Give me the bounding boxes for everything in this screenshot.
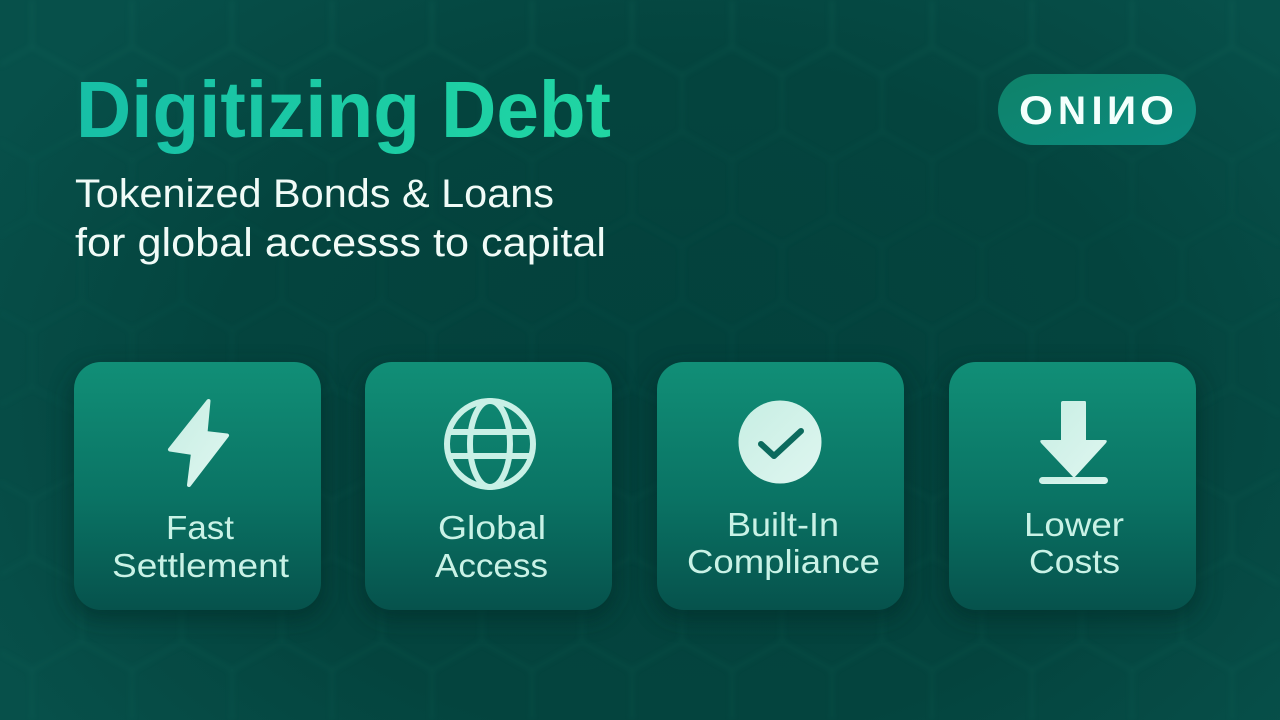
- logo: ONINO pill: N: [1058, 89, 1086, 133]
- panel: Built-In Compliance: [653, 362, 908, 620]
- label: Built-In Compliance: Compliance: [687, 543, 880, 580]
- label: Global Access: Global: [438, 509, 546, 546]
- logo: ONINO pill: N: [1107, 89, 1136, 133]
- logo: ONINO pill: I: [1092, 89, 1103, 133]
- label: Lower Costs: Costs: [1029, 543, 1120, 580]
- label: Lower Costs: [1024, 506, 1124, 580]
- label: Built-In Compliance: [687, 506, 880, 580]
- panel: Global Access: [361, 362, 616, 620]
- logo: ONINO pill: O: [1019, 89, 1053, 133]
- label: Lower Costs: Lower: [1024, 506, 1124, 543]
- label: Fast Settlement: Settlement: [112, 547, 289, 584]
- icon: check circle: [738, 400, 822, 484]
- subtitle: [75, 172, 606, 265]
- logo: ONINO pill: O: [1140, 89, 1174, 133]
- icon: lightning bolt: [170, 401, 227, 485]
- title: Digitizing Debt: [76, 65, 611, 154]
- subtitle: for global accesss to capital: [75, 221, 606, 265]
- label: Fast Settlement: [112, 509, 289, 584]
- panel: Lower Costs: [945, 362, 1200, 620]
- subtitle: Tokenized Bonds & Loans: [75, 172, 554, 216]
- label: Built-In Compliance: Built-In: [727, 506, 839, 543]
- label: Global Access: [435, 509, 548, 584]
- icon: globe: [447, 401, 533, 487]
- icon: download arrow: [1039, 401, 1108, 484]
- logo: ONINO pill: [998, 74, 1196, 145]
- label: Global Access: Access: [435, 547, 548, 584]
- panel: Fast Settlement: [70, 362, 325, 620]
- label: Fast Settlement: Fast: [166, 509, 234, 546]
